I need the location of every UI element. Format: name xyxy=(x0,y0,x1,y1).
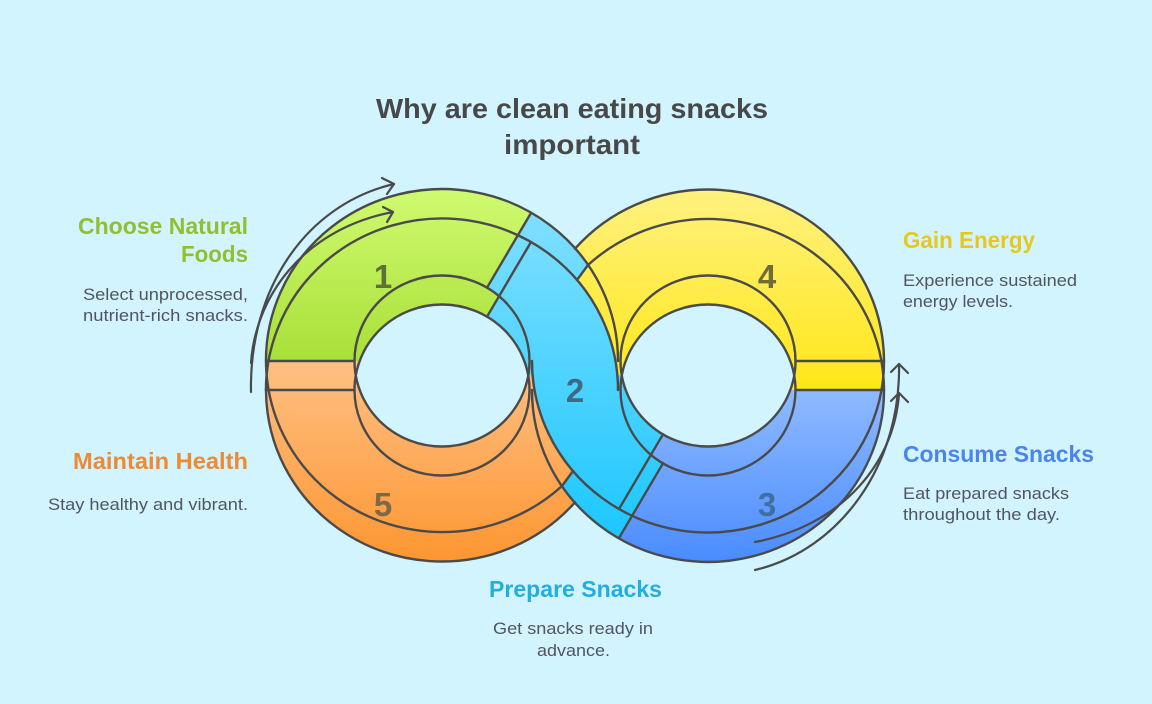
infinity loop diagram xyxy=(266,189,884,562)
label: Prepare Snacks: advance. xyxy=(537,641,610,660)
label: Choose Natural Foods: nutrient-rich snacks. xyxy=(83,306,248,325)
label: Consume Snacks xyxy=(903,441,1094,524)
label: Choose Natural Foods xyxy=(78,213,248,325)
label: Prepare Snacks xyxy=(489,576,662,660)
title: important xyxy=(504,129,640,160)
label: Gain Energy xyxy=(903,227,1077,311)
label: Gain Energy: Gain Energy xyxy=(903,227,1035,253)
segment 4: yellow xyxy=(575,190,884,390)
label: Gain Energy: Experience sustained xyxy=(903,271,1077,290)
label: Maintain Health: Maintain Health xyxy=(73,448,248,474)
number 5: 5 xyxy=(374,486,392,523)
segment 2: cyan xyxy=(487,213,663,538)
title: Why are clean eating snacks xyxy=(376,93,768,124)
label: Consume Snacks: Eat prepared snacks xyxy=(903,484,1069,503)
label: Maintain Health xyxy=(48,448,248,514)
number 1: 1 xyxy=(374,258,392,295)
segment 3: blue xyxy=(619,390,884,562)
arrows: bottom right xyxy=(755,364,908,570)
segment 1: green xyxy=(266,189,531,361)
label: Choose Natural Foods: Foods xyxy=(181,241,248,267)
arrows: top left xyxy=(251,178,394,392)
label: Maintain Health: Stay healthy and vibrant. xyxy=(48,495,248,514)
number 2: 2 xyxy=(566,372,584,409)
label: Prepare Snacks: Prepare Snacks xyxy=(489,576,662,602)
label: Choose Natural Foods: Select unprocessed, xyxy=(83,285,248,304)
label: Consume Snacks: Consume Snacks xyxy=(903,441,1094,467)
label: Consume Snacks: throughout the day. xyxy=(903,505,1060,524)
title xyxy=(376,93,768,160)
label: Choose Natural Foods: Choose Natural xyxy=(78,213,248,239)
segment 5: orange xyxy=(266,361,575,561)
number 3: 3 xyxy=(758,486,776,523)
label: Gain Energy: energy levels. xyxy=(903,292,1013,311)
number 4: 4 xyxy=(758,258,777,295)
segment outlines xyxy=(266,189,884,562)
label: Prepare Snacks: Get snacks ready in xyxy=(493,619,653,638)
